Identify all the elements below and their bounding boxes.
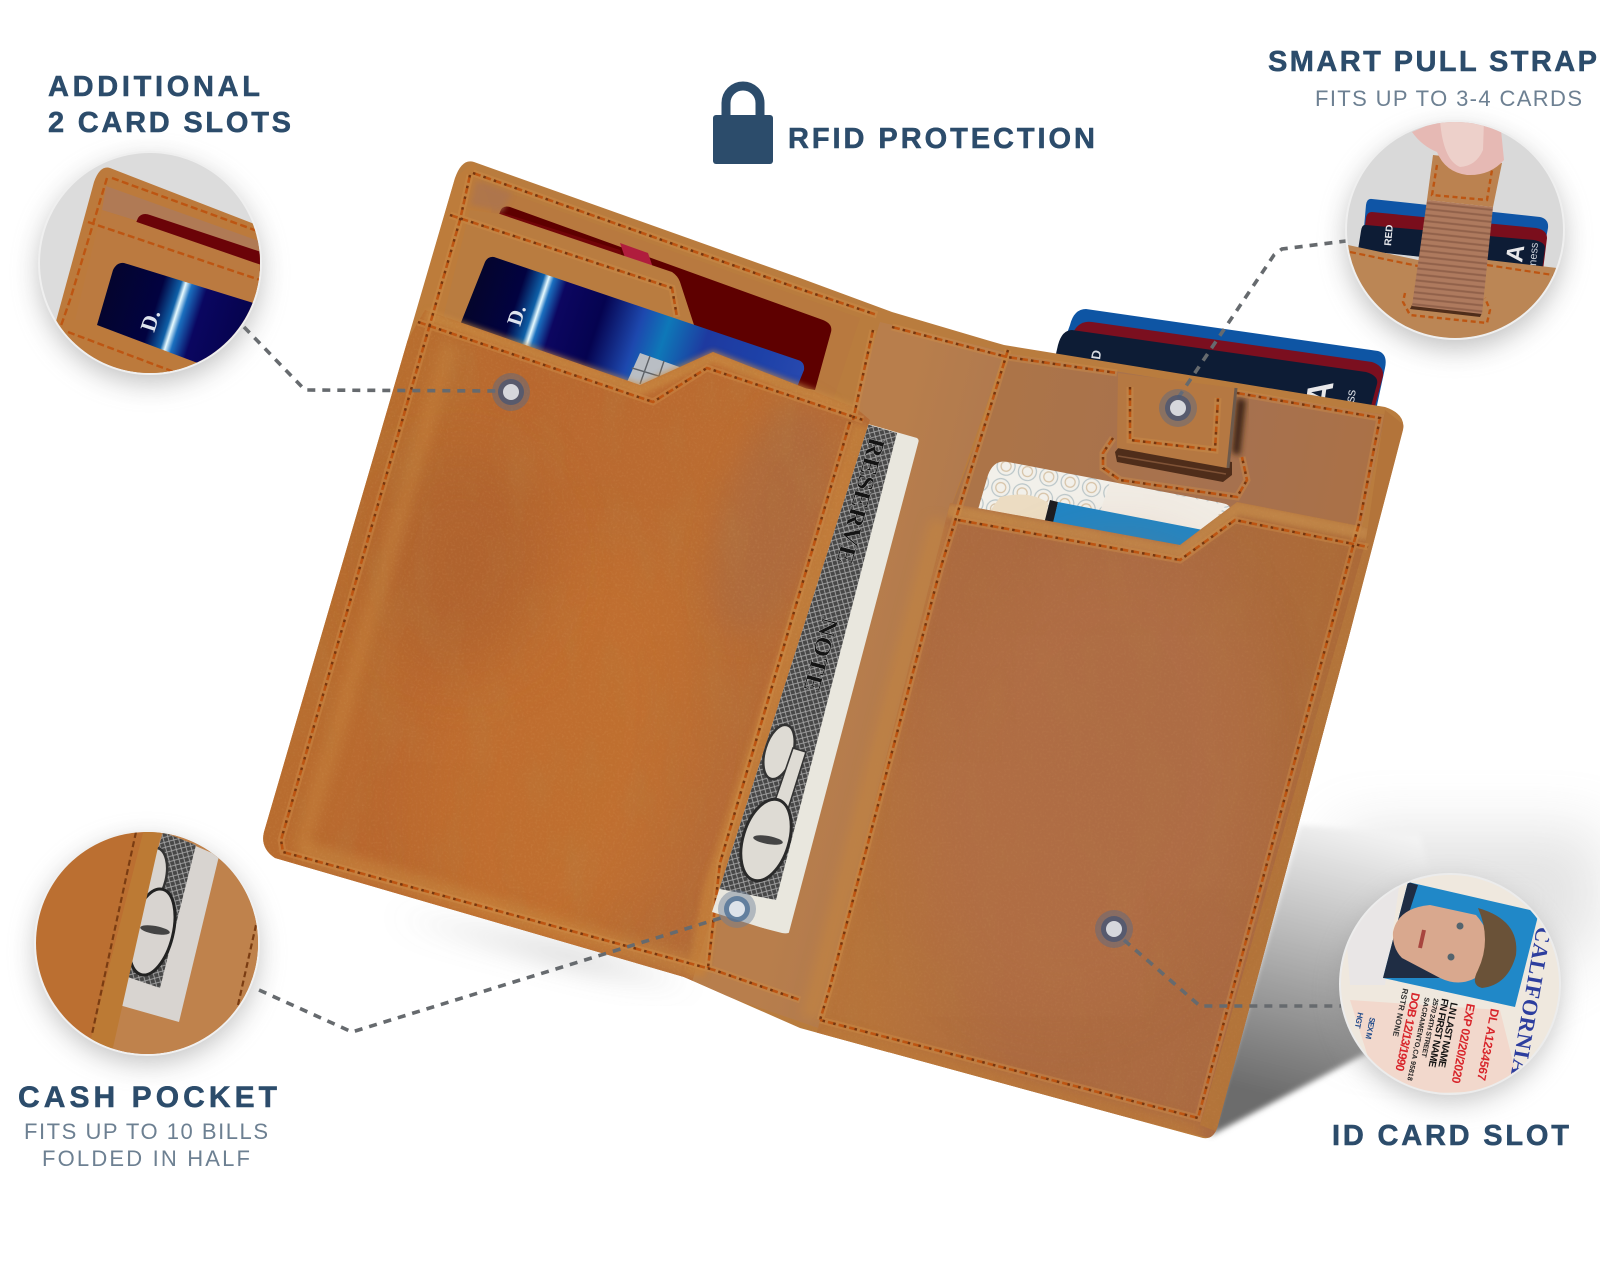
banknote in cash pocket: NOTE [798,614,842,695]
ID text lines: 2570 24TH STREET [1419,998,1439,1058]
back slot with red card [499,206,832,390]
heading: RFID protection: RFID PROTECTION [788,123,1095,155]
ID text lines: HGT [1353,1012,1365,1029]
heading: id card slot: ID CARD SLOT [1332,1120,1569,1152]
tab side edge [1228,388,1236,468]
right pocket texture [800,500,1400,1150]
ID photo [1383,882,1537,1007]
cards in inset: ness [1527,242,1541,266]
ID text lines: SEX M [1363,1017,1377,1040]
heading: additional 2 card slots: ADDITIONAL [48,71,260,103]
circle inset: smart pull strap [1340,120,1570,350]
drop shadow under wallet [395,825,1600,1136]
left front pocket [200,310,870,982]
banknote in cash pocket [700,424,919,933]
ID text lines: RSTR NONE [1391,988,1410,1038]
banknote in cash pocket: RESERVE [831,434,889,567]
ID text lines: EXP 02/20/2020 [1449,1002,1478,1085]
wallet [200,150,1420,1150]
circle inset: cash pocket [30,825,270,1065]
heading: additional 2 card slots: 2 CARD SLOTS [48,107,291,139]
heading: smart pull strap: FITS UP TO 3-4 CARDS [1315,86,1582,111]
blue card: D. [502,302,531,329]
hotspot: cash pocket [718,890,756,928]
credit cards behind right panel: ss [1342,388,1359,403]
ID text lines: SACRAMENTO,CA 95818 [1405,997,1430,1081]
ID card [978,462,1230,545]
ID text lines: DL A1234567 [1474,1007,1502,1082]
credit cards behind right panel: D [1088,349,1104,360]
leader: additional slots [244,327,500,391]
credit cards behind right panel [1050,309,1386,410]
leader: id slot [1124,940,1341,1006]
left pocket mottling [300,315,862,1007]
heading: cash pocket [18,1081,277,1171]
circle inset: ID card [1335,870,1570,1101]
upper right panel [950,354,1385,535]
pull tab [1117,373,1235,468]
worn patch at top corner [472,182,508,214]
hotspot: additional slots [492,373,530,411]
blue card [461,256,804,386]
wallet base leather [250,150,1420,1150]
heading: cash pocket: FITS UP TO 10 BILLS [24,1119,268,1144]
cards in inset: RED [1383,224,1396,246]
ID text lines: CALIFORNIA [1506,925,1557,1077]
cards in inset: A [1501,243,1530,264]
heading: cash pocket: CASH POCKET [18,1081,277,1114]
hinge leather [680,322,1005,1030]
circle inset: additional card slots: D. [135,306,165,335]
hotspot: pull strap [1159,389,1197,427]
hotspot: id slot [1095,910,1133,948]
cards in inset [1358,199,1548,270]
left wallet strip [434,178,456,252]
leader: cash pocket [259,917,724,1032]
ID text lines: FN FIRST NAME [1426,997,1450,1069]
ID text lines [1353,925,1557,1085]
right wallet rim [1200,410,1404,1135]
heading: cash pocket: FOLDED IN HALF [42,1146,250,1171]
heading: additional 2 card slots [48,71,291,139]
middle pocket [490,214,694,325]
left pocket texture [285,340,839,944]
stitching ridge and thread [281,173,1380,1118]
right panel shading [1082,522,1188,545]
heading: smart pull strap [1268,46,1597,111]
right pocket [815,502,1370,1140]
right pocket edge highlight [946,508,1370,552]
icon: padlock [713,86,773,164]
credit cards behind right panel: A [1297,378,1342,409]
ID text lines: DOB 12/13/1990 [1392,991,1423,1073]
ID text lines: LN LAST NAME [1435,1001,1459,1069]
circle inset: additional card slots [30,150,270,400]
pull tab slot [1115,398,1246,482]
leader lines [244,241,1346,1032]
heading: smart pull strap: SMART PULL STRAP [1268,46,1597,78]
leader: smart pull strap [1178,241,1346,398]
